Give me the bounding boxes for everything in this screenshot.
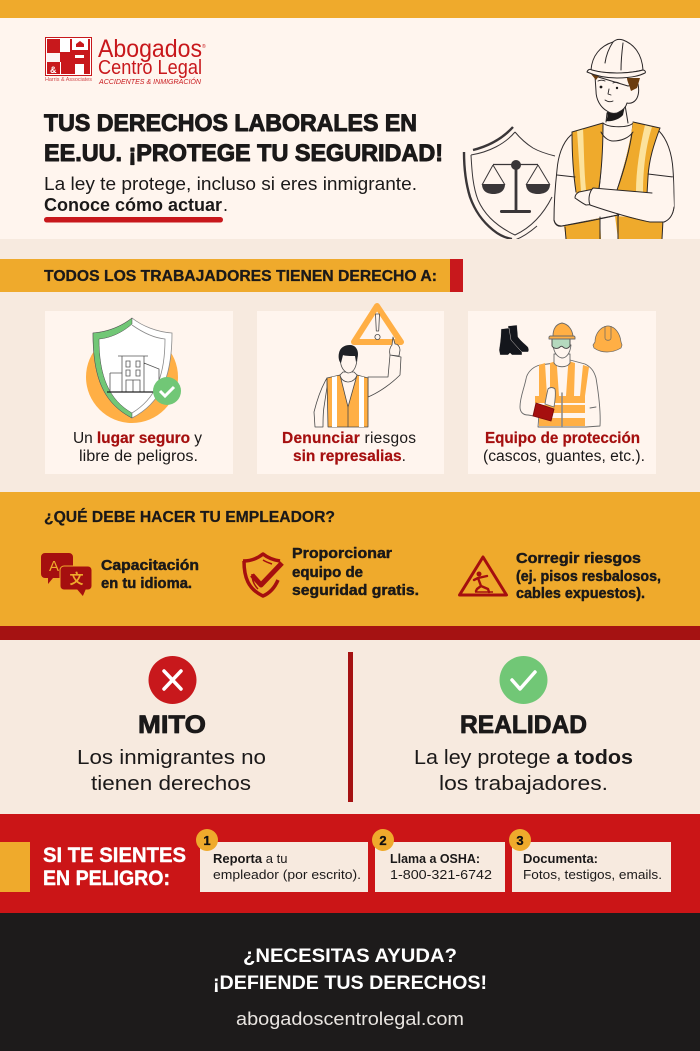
- icon: boots: [499, 325, 529, 355]
- icon: shield with scales: [464, 127, 555, 240]
- icon: shield with building: [86, 318, 181, 423]
- column: myth: [77, 656, 266, 795]
- subtitle: Conoce cómo actuar: [44, 195, 222, 215]
- text: free equipment: [292, 546, 419, 599]
- dark red divider band: [0, 626, 700, 640]
- text: training: Capacitación: [101, 558, 199, 574]
- logo: Centro Legal: [98, 57, 202, 79]
- step 2: [372, 829, 505, 892]
- logo: Abogados: [98, 35, 202, 63]
- panel: employer duties: [0, 492, 700, 626]
- card: report risks: [257, 306, 444, 474]
- card text: Un lugar seguro y: [73, 430, 202, 447]
- column: reality: [414, 656, 633, 795]
- icon: helmet: [593, 326, 622, 352]
- card: safe workplace: [45, 311, 233, 474]
- call to action: ¿NECESITAS AYUDA?: [243, 945, 457, 967]
- panel: rights: [0, 239, 700, 492]
- call to action: [213, 945, 487, 994]
- card: protective gear: [468, 311, 656, 474]
- text: free equipment: Proporcionar: [292, 546, 392, 562]
- card text: Equipo de protección: [485, 430, 640, 447]
- icon: translation bubbles: 文: [70, 571, 84, 587]
- step 3: [509, 829, 671, 892]
- step 3: 3: [516, 833, 524, 848]
- panel: if in danger: [0, 814, 700, 913]
- illustration: worker reporting hazard: [314, 306, 401, 427]
- column: myth: Los inmigrantes no: [77, 746, 266, 769]
- text: fix hazards: Corregir riesgos: [516, 551, 641, 567]
- title: TUS DERECHOS LABORALES EN: [44, 110, 417, 137]
- illustration: worker with safety gear: [520, 323, 600, 427]
- center divider: [348, 652, 353, 802]
- logo: ®: [202, 43, 206, 50]
- column: reality: los trabajadores.: [439, 772, 608, 795]
- logo: [45, 35, 206, 86]
- card text: sin represalias.: [293, 448, 406, 465]
- icon: shield check: [243, 554, 282, 596]
- card text: libre de peligros.: [79, 448, 198, 465]
- step 1: empleador (por escrito).: [213, 867, 361, 882]
- column: reality: REALIDAD: [460, 711, 587, 739]
- card text: [73, 430, 202, 465]
- panel: header: [0, 18, 700, 240]
- heading: SI TE SIENTES: [43, 843, 186, 867]
- step 2: Llama a OSHA:: [390, 851, 480, 866]
- card text: Denunciar riesgos: [282, 430, 416, 447]
- underline: [44, 217, 223, 222]
- logo: ACCIDENTES & INMIGRACIÓN: [98, 77, 202, 86]
- subtitle: [44, 174, 417, 215]
- step 2: 2: [379, 833, 387, 848]
- column: myth: tienen derechos: [91, 772, 251, 795]
- panel: myth vs reality: [0, 640, 700, 814]
- step 1: [196, 829, 368, 892]
- step 3: Fotos, testigos, emails.: [523, 867, 662, 882]
- column: myth: MITO: [138, 711, 206, 739]
- banner: TODOS LOS TRABAJADORES TIENEN DERECHO A:: [44, 268, 437, 285]
- text: free equipment: seguridad gratis.: [292, 583, 419, 599]
- logo: &: [50, 65, 57, 75]
- column: reality: La ley protege a todos: [414, 746, 633, 769]
- step 1: Reporta a tu: [213, 851, 287, 866]
- text: fix hazards: cables expuestos).: [516, 586, 645, 602]
- card text: [483, 430, 645, 465]
- subtitle: La ley te protege, incluso si eres inmigrante.: [44, 174, 417, 194]
- text: free equipment: equipo de: [292, 565, 363, 581]
- website: abogadoscentrolegal.com: [236, 1009, 464, 1029]
- orange tab: [0, 842, 30, 892]
- icon: translation bubbles: A: [49, 558, 59, 575]
- top accent bar: [0, 0, 700, 18]
- heading: EN PELIGRO:: [43, 866, 170, 890]
- title: EE.UU. ¡PROTEGE TU SEGURIDAD!: [44, 140, 443, 167]
- text: fix hazards: (ej. pisos resbalosos,: [516, 569, 661, 585]
- call to action: ¡DEFIENDE TUS DERECHOS!: [213, 972, 487, 994]
- title: [44, 110, 443, 167]
- heading: ¿QUÉ DEBE HACER TU EMPLEADOR?: [44, 509, 335, 526]
- icon: slippery floor warning: [460, 557, 506, 595]
- illustration: worker with arms crossed: [554, 39, 674, 239]
- warning triangle: [354, 306, 401, 342]
- panel: footer: [0, 913, 700, 1051]
- text: training: [101, 558, 199, 592]
- banner: [0, 259, 463, 292]
- step 2: 1-800-321-6742: [390, 867, 492, 882]
- text: training: en tu idioma.: [101, 576, 192, 592]
- logo: Harris & Associates: [45, 77, 92, 83]
- icon: translation bubbles: [41, 553, 92, 597]
- card text: (cascos, guantes, etc.).: [483, 448, 645, 465]
- step 1: 1: [203, 833, 211, 848]
- step 3: Documenta:: [523, 851, 598, 866]
- subtitle: .: [223, 195, 228, 215]
- card text: [282, 430, 416, 465]
- heading: [43, 843, 186, 890]
- text: fix hazards: [516, 551, 661, 602]
